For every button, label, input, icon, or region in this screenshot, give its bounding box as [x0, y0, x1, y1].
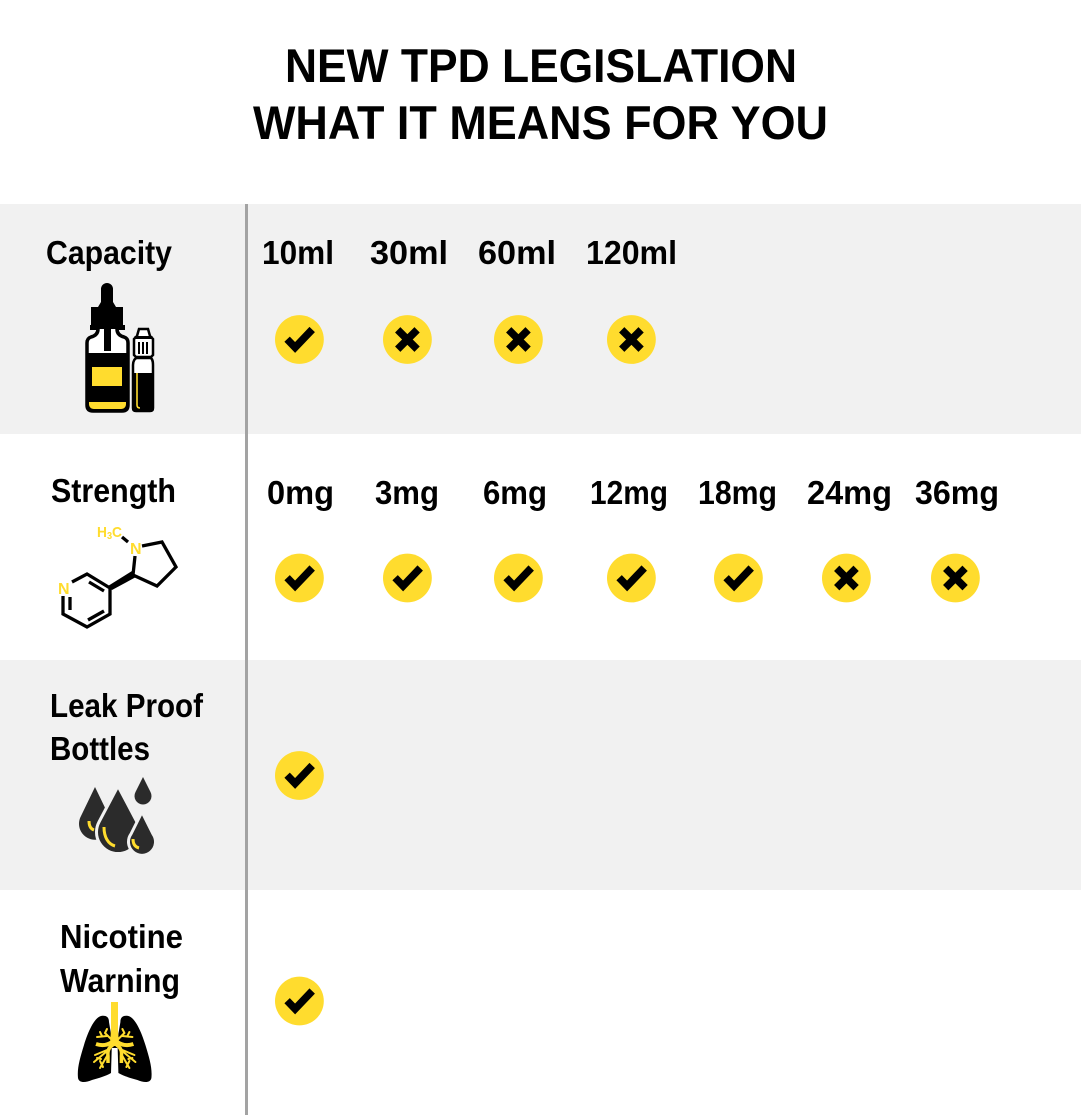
strength columns: 3mg	[375, 474, 439, 511]
icon: bottles	[86, 283, 154, 412]
panel: capacity	[46, 234, 677, 412]
leak proof label: Bottles	[50, 730, 150, 767]
icon: nicotine molecule: N	[130, 541, 142, 558]
capacity columns: 10ml	[262, 234, 334, 271]
panel: leak proof bottles	[50, 687, 324, 855]
strength columns	[267, 474, 999, 602]
icon: nicotine molecule	[58, 524, 176, 627]
icon: droplets	[79, 777, 156, 855]
strength columns: 18mg	[698, 474, 777, 511]
strength columns: 0mg	[267, 474, 334, 511]
panel: nicotine warning	[60, 918, 324, 1082]
icon: nicotine molecule: N	[58, 581, 70, 598]
strength columns: 6mg	[483, 474, 547, 511]
capacity columns	[262, 234, 677, 364]
title: NEW TPD LEGISLATION	[285, 39, 797, 92]
nicotine warning check	[275, 977, 324, 1025]
leak proof label	[50, 687, 204, 767]
icon: nicotine molecule: H	[97, 524, 108, 541]
capacity label: Capacity	[46, 234, 173, 271]
panel: strength	[51, 472, 999, 627]
nicotine warning label: Warning	[60, 962, 180, 999]
strength columns: 36mg	[915, 474, 999, 511]
icon: nicotine molecule: C	[112, 524, 122, 541]
strength columns: 12mg	[590, 474, 668, 511]
title: WHAT IT MEANS FOR YOU	[253, 96, 828, 149]
nicotine warning label	[60, 918, 183, 999]
icon: lungs	[78, 1002, 152, 1082]
capacity columns: 60ml	[478, 234, 556, 271]
title	[253, 39, 828, 149]
strength label: Strength	[51, 472, 176, 509]
capacity columns: 30ml	[370, 234, 448, 271]
icon: nicotine molecule: 3	[107, 531, 112, 542]
strength columns: 24mg	[807, 474, 892, 511]
leak proof check	[275, 751, 324, 800]
capacity columns: 120ml	[586, 234, 677, 271]
leak proof label: Leak Proof	[50, 687, 204, 724]
nicotine warning label: Nicotine	[60, 918, 183, 955]
